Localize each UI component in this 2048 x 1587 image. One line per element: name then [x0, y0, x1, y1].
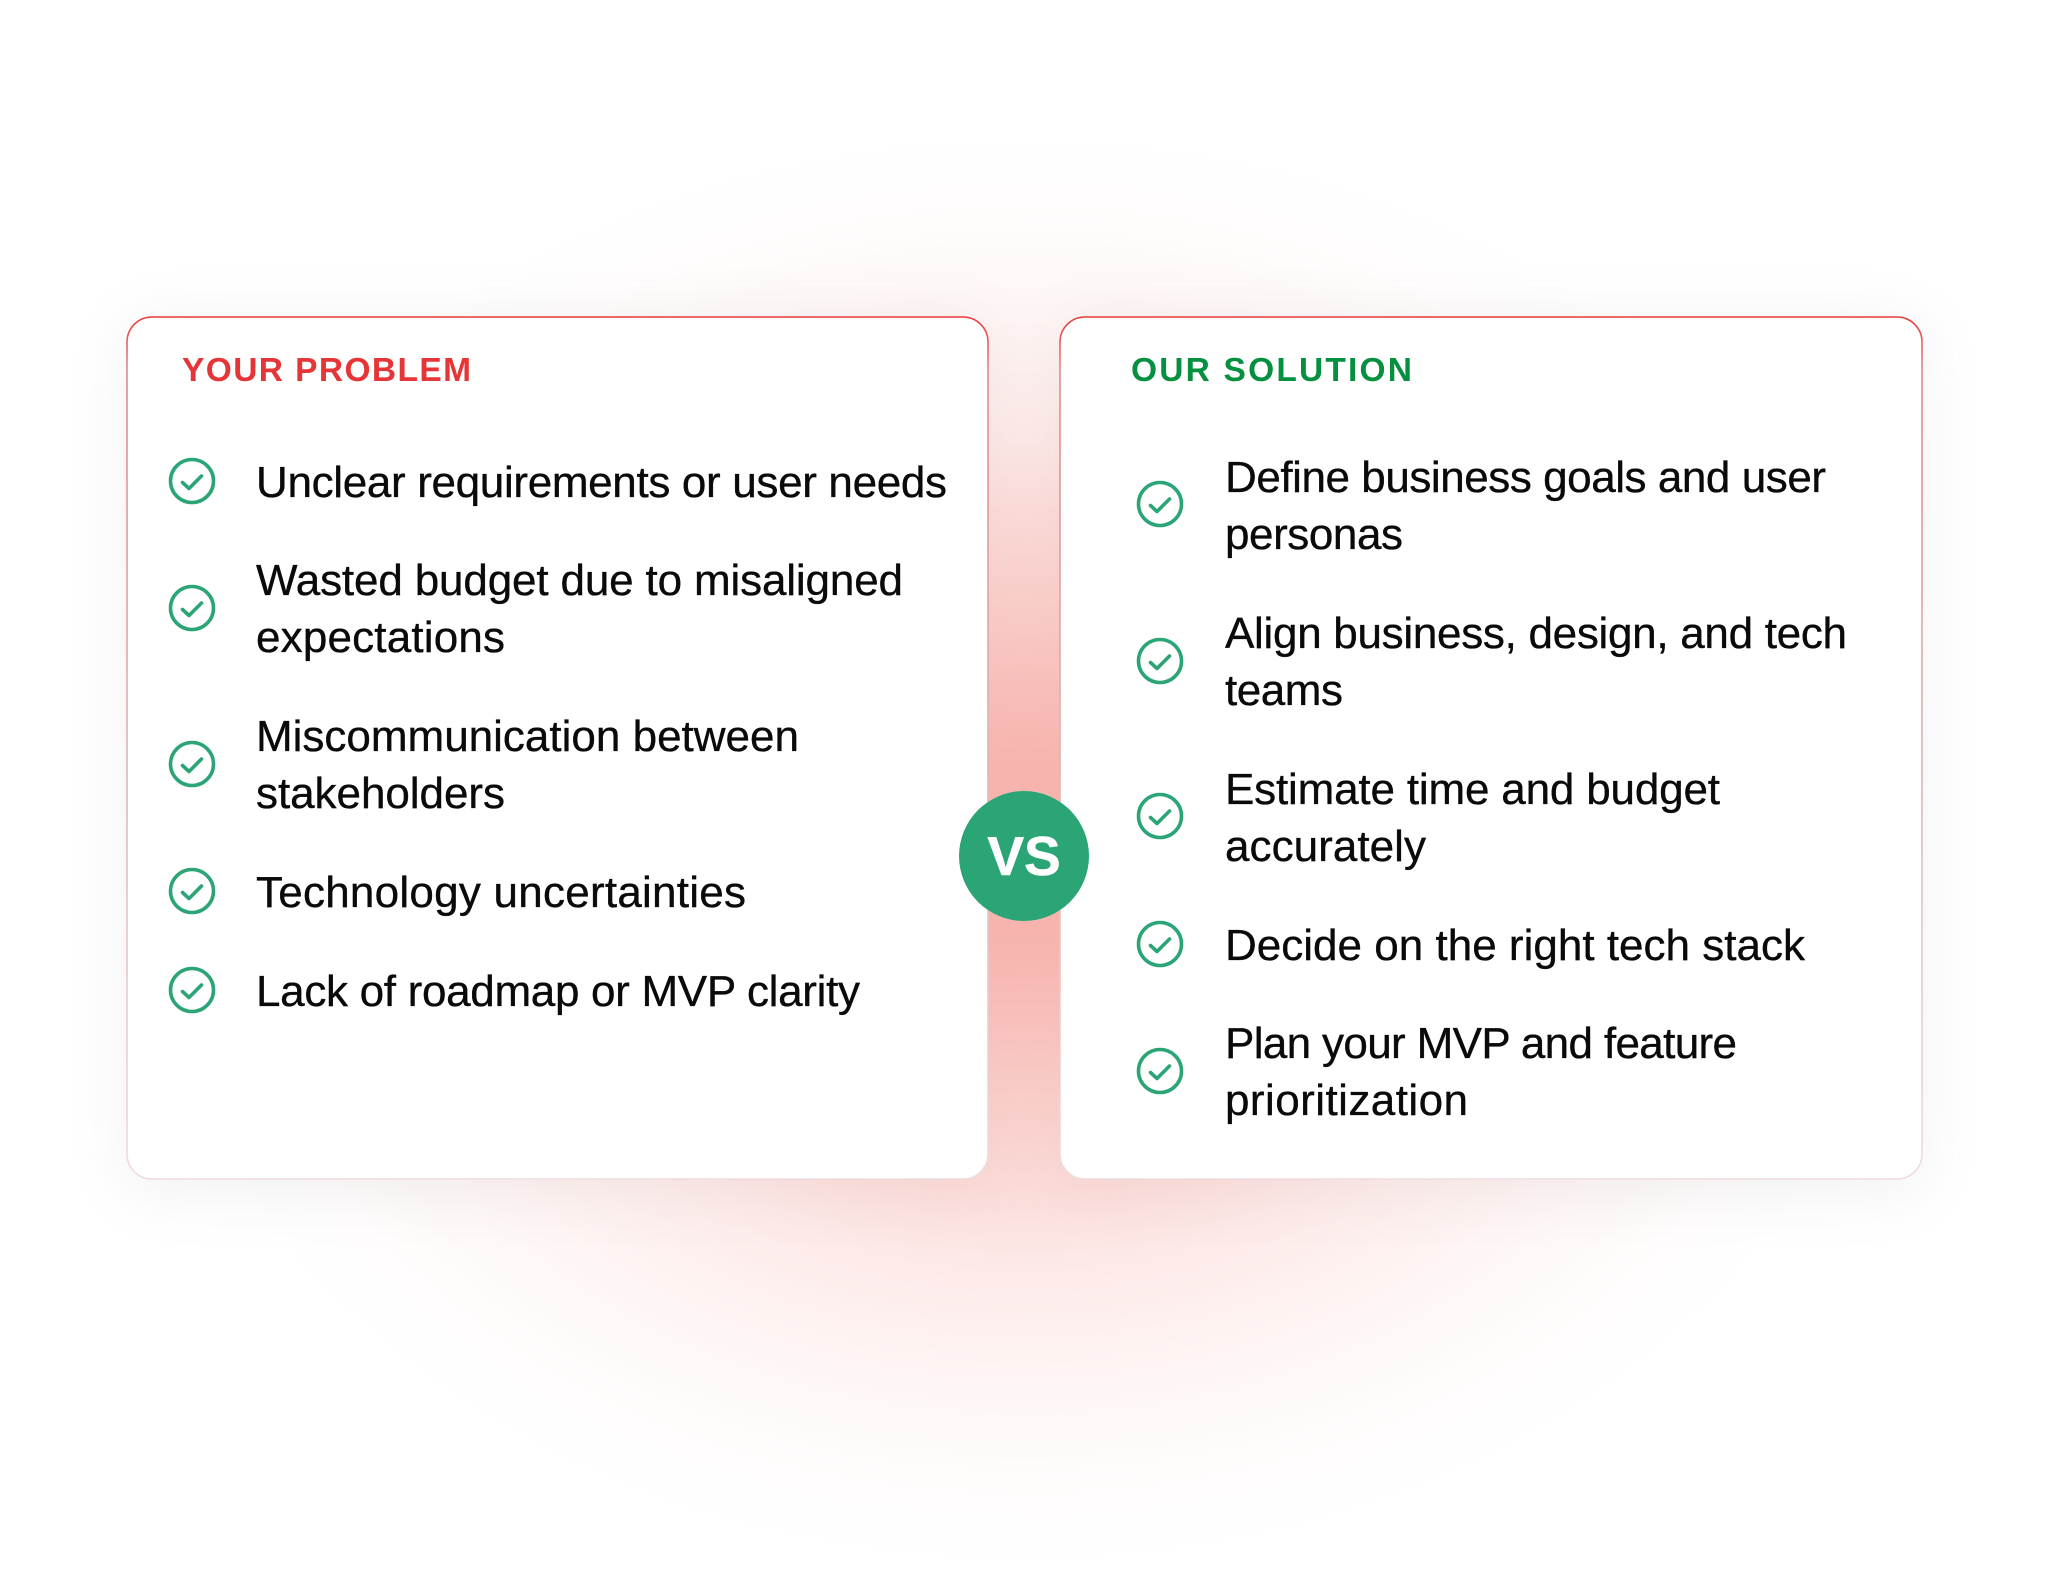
- item: define goals: [1138, 453, 1826, 559]
- item: estimate time: Estimate time and budget: [1225, 765, 1720, 814]
- item: plan mvp: Plan your MVP and feature: [1225, 1019, 1737, 1068]
- item: miscommunication: stakeholders: [256, 769, 505, 818]
- item: tech stack: Decide on the right tech stack: [1225, 921, 1806, 970]
- card: solution background: [1060, 317, 1922, 1179]
- item: technology uncertainties: Technology uncertainties: [256, 868, 746, 917]
- vs badge: VS: [987, 825, 1061, 887]
- item: miscommunication: [170, 712, 799, 818]
- item: estimate time: accurately: [1225, 822, 1426, 871]
- item: miscommunication: Miscommunication between: [256, 712, 799, 761]
- item: estimate time: [1138, 765, 1720, 871]
- item: align teams: teams: [1225, 666, 1343, 715]
- item: plan mvp: [1138, 1019, 1737, 1125]
- item: lack of roadmap: Lack of roadmap or MVP clarity: [256, 967, 860, 1016]
- item: wasted budget: [170, 556, 903, 662]
- item: wasted budget: expectations: [256, 613, 505, 662]
- item: plan mvp: prioritization: [1225, 1076, 1468, 1125]
- item: define goals: personas: [1225, 510, 1403, 559]
- panel: your problem: [127, 317, 988, 1179]
- item: unclear requirements: Unclear requirements or user needs: [256, 458, 947, 507]
- card shadows: [127, 322, 1922, 1192]
- card: problem background: [127, 317, 988, 1179]
- heading: your problem: YOUR PROBLEM: [182, 352, 471, 389]
- item: wasted budget: Wasted budget due to misaligned: [256, 556, 903, 605]
- heading: our solution: OUR SOLUTION: [1131, 352, 1412, 389]
- vs badge: [959, 791, 1089, 921]
- item: define goals: Define business goals and user: [1225, 453, 1826, 502]
- item: align teams: [1138, 609, 1847, 715]
- item: align teams: Align business, design, and tech: [1225, 609, 1847, 658]
- panel: our solution: [1060, 317, 1922, 1179]
